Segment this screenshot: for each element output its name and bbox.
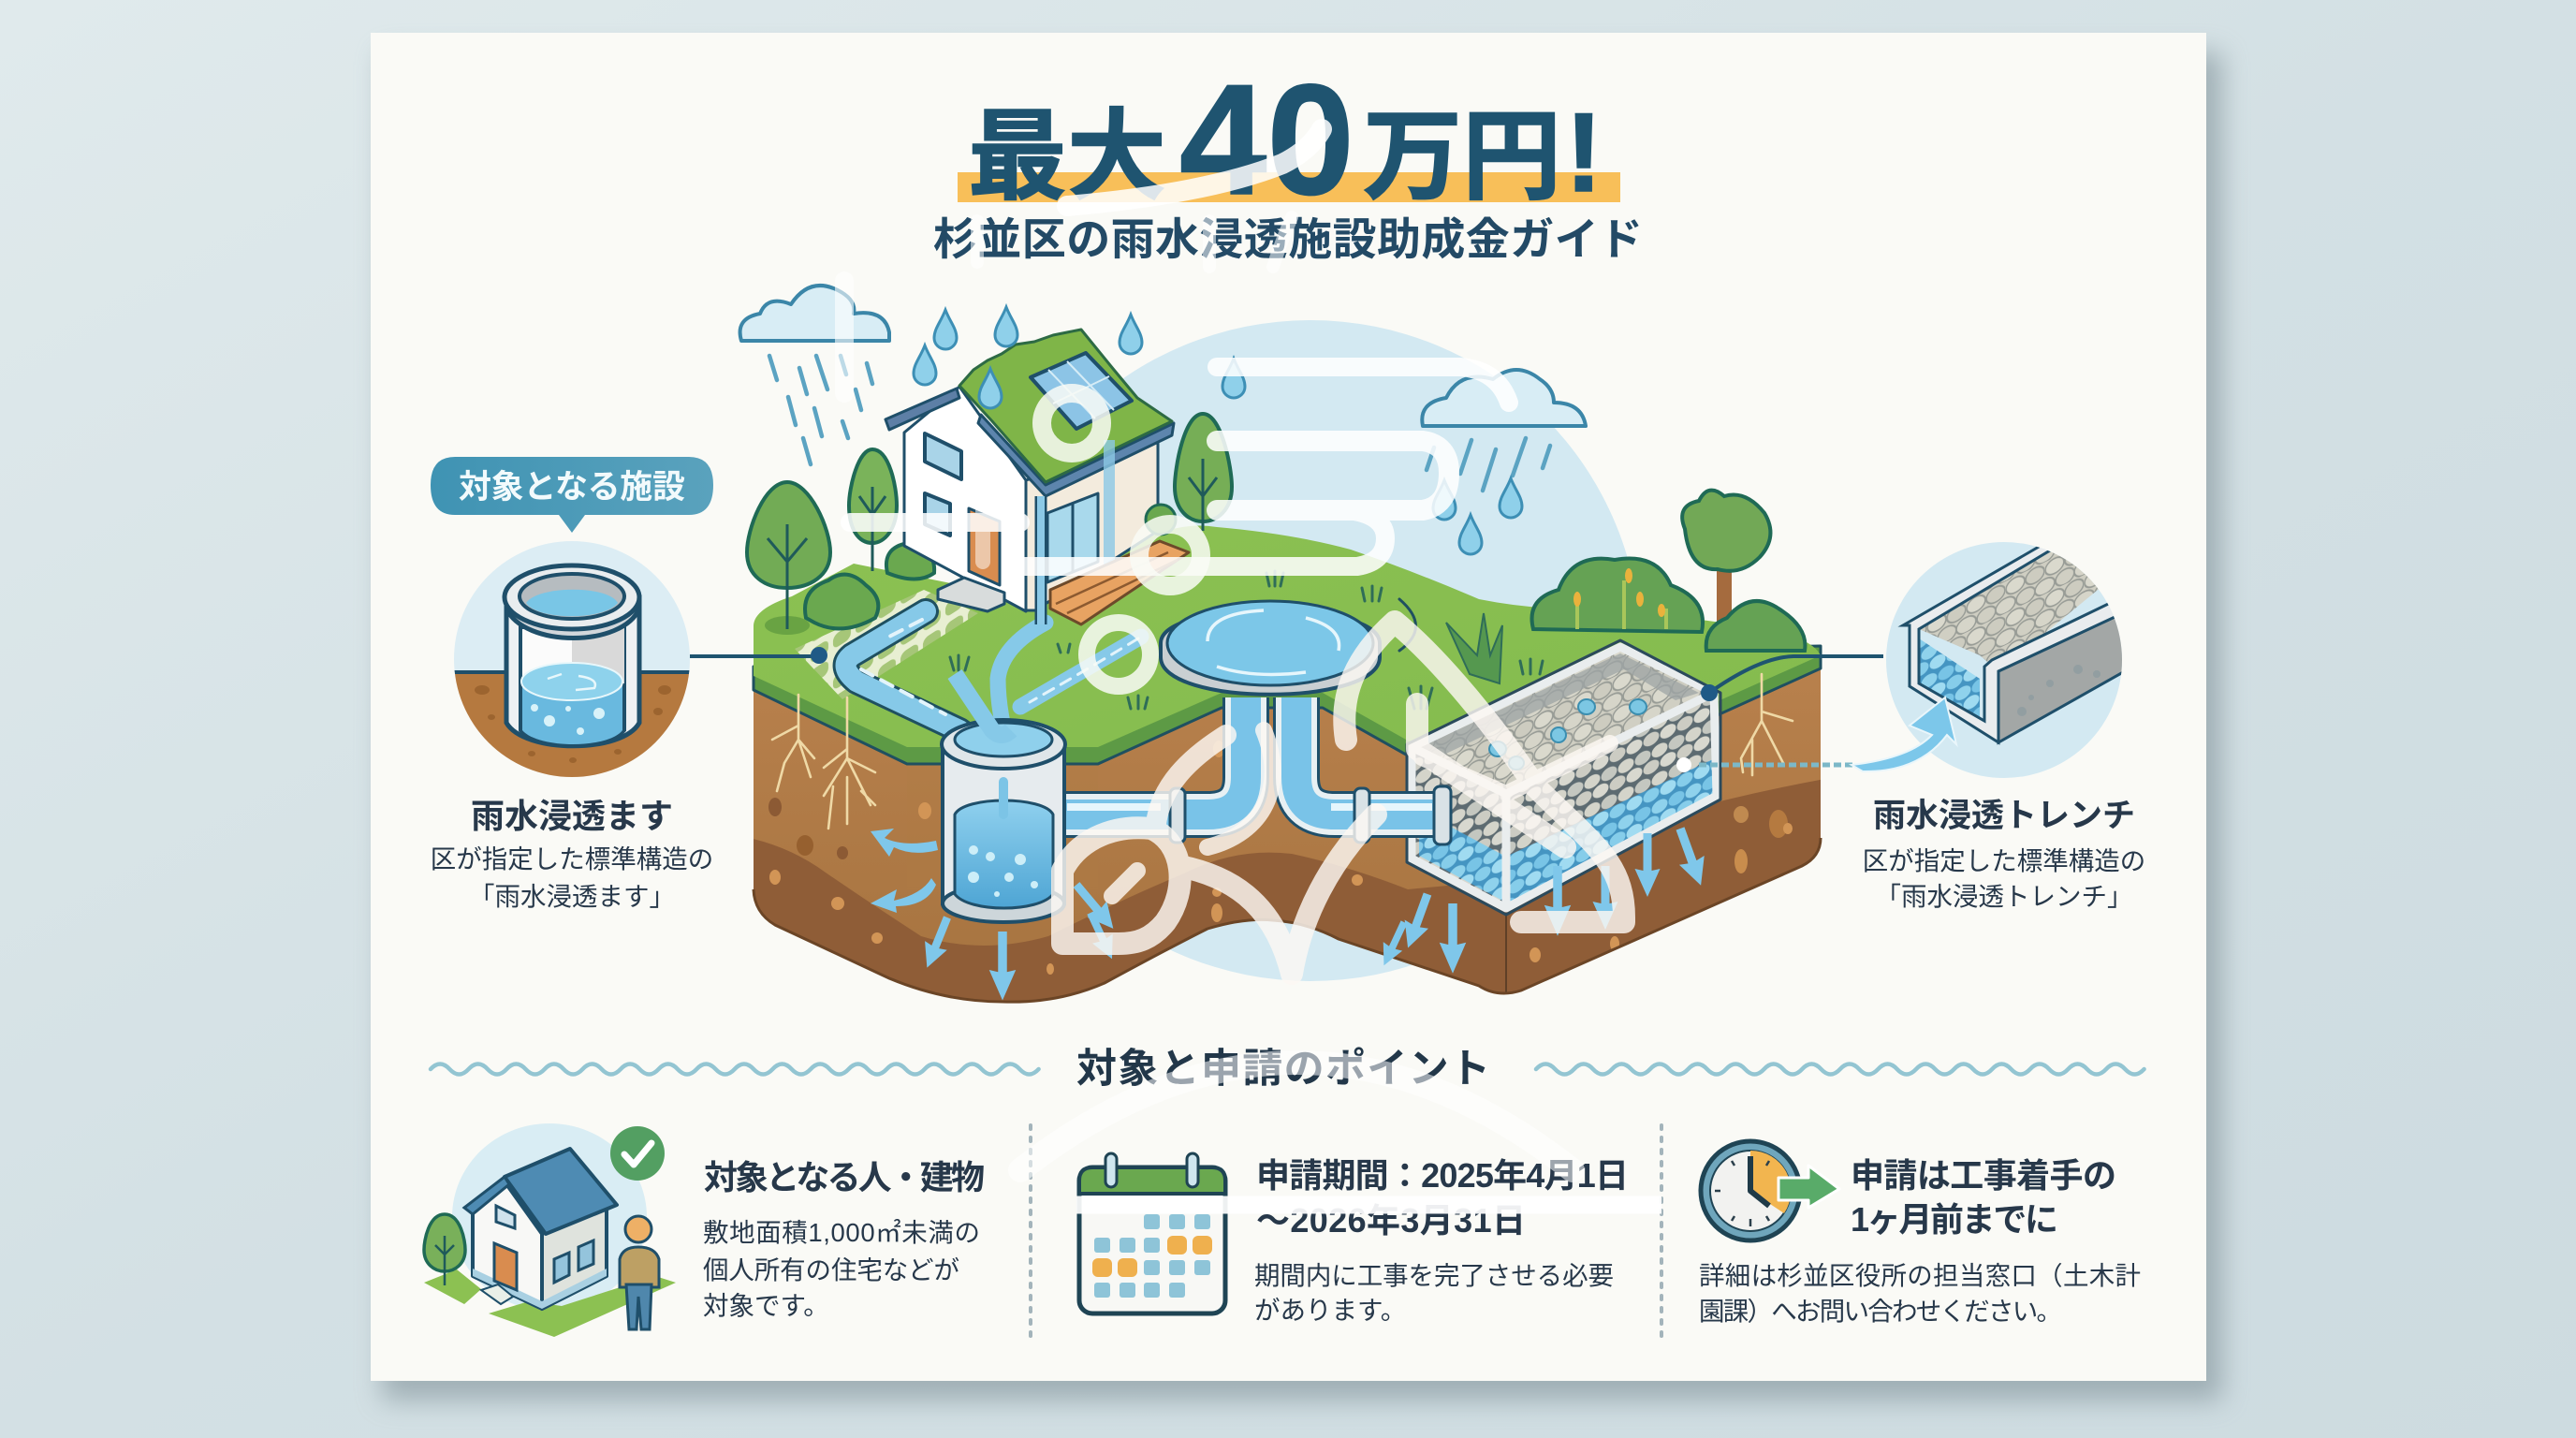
text: deadline: 詳細は杉並区役所の担当窓口（土木計 (1699, 1261, 2141, 1290)
pond (1161, 601, 1380, 695)
grass top (754, 526, 1821, 796)
text: period: 申請期間：2025年4月1日 (1256, 1156, 1629, 1195)
roof fascia (886, 389, 959, 430)
point 3: apply before construction (1699, 1141, 2141, 1326)
label: infiltration trench: 雨水浸透トレンチ (1873, 798, 2135, 834)
paved path (795, 590, 978, 699)
label: infiltration basin (431, 797, 713, 911)
point 1: who and what building (424, 1123, 985, 1337)
solar panel (1031, 353, 1132, 429)
rain drops around house (914, 307, 1245, 408)
basin body (506, 599, 639, 746)
label: infiltration basin: 「雨水浸透ます」 (469, 882, 675, 911)
text: period: があります。 (1254, 1296, 1406, 1325)
trench section (1998, 616, 2122, 745)
text: who and what: 敷地面積1,000㎡未満の (703, 1218, 980, 1247)
soil pebbles (768, 741, 1793, 975)
label: infiltration trench (1863, 798, 2145, 911)
connector line: right detail (1676, 656, 1883, 772)
title highlight bar (958, 172, 1620, 202)
dotted divider 1 (1029, 1125, 1032, 1339)
dotted divider 2 (1660, 1125, 1663, 1339)
label: infiltration basin: 区が指定した標準構造の (431, 844, 713, 873)
icon: clock with arrow (1701, 1141, 1839, 1240)
label: infiltration trench: 区が指定した標準構造の (1863, 846, 2145, 875)
small bush by deck (1146, 505, 1176, 535)
trench frame (1412, 647, 1717, 908)
left cut face (1412, 749, 1506, 908)
label: infiltration basin: 雨水浸透ます (471, 797, 673, 835)
left rain cloud (740, 286, 889, 464)
icon: house with person (424, 1123, 676, 1337)
right cut face (1506, 695, 1717, 904)
detail circle: infiltration basin (449, 538, 695, 781)
wave divider right (1536, 1064, 2144, 1075)
section heading: 対象と申請のポイント (1076, 1047, 1490, 1092)
text: who and what: 対象となる人・建物 (704, 1158, 985, 1196)
watermark icon overlay (844, 129, 1661, 1205)
downpipe (1035, 496, 1046, 624)
left wall (904, 387, 1026, 611)
watermark: rings (1042, 393, 1201, 686)
backdrop circle behind diagram (980, 320, 1641, 981)
stairs (938, 578, 1004, 611)
door (969, 508, 1000, 585)
callout pill: target facilities: 対象となる施設 (459, 469, 685, 506)
text: who and what: 対象です。 (703, 1291, 829, 1320)
text: deadline (1699, 1156, 2141, 1326)
title text: 万円 (1363, 102, 1561, 213)
title: maximum 400,000 yen (958, 51, 1620, 227)
pipe flanges (1170, 786, 1451, 844)
callout pill: target facilities (431, 457, 713, 533)
check badge (610, 1126, 665, 1181)
tree roots (772, 674, 1793, 829)
back wall shading (1421, 653, 1699, 760)
green roof (959, 330, 1172, 482)
right wall (1026, 440, 1158, 610)
rainwater infiltration basin cross-section (942, 674, 1065, 922)
watermark: wind and house lines (844, 281, 1509, 566)
text: period (1254, 1156, 1629, 1325)
label: infiltration trench: 「雨水浸透トレンチ」 (1876, 882, 2132, 911)
watermark: leaf and bow shapes (1062, 622, 1624, 974)
point 2: application period (1079, 1153, 1629, 1325)
connector line: left detail (690, 647, 827, 664)
glass door (1047, 493, 1098, 582)
wave divider left (431, 1064, 1039, 1075)
house with green roof (886, 330, 1189, 624)
right tree beside house (1175, 414, 1232, 531)
pipes (1048, 697, 1446, 814)
stone-filled trench (1407, 640, 1720, 915)
text: period: ～2026年3月31日 (1256, 1201, 1526, 1240)
detail circle: infiltration trench (1852, 542, 2153, 778)
tall grass (1446, 613, 1502, 683)
shrubs and tree on right (1532, 491, 1805, 651)
isometric landscape diagram (740, 286, 1825, 1011)
right rain cloud (1422, 370, 1586, 554)
text: period: 期間内に工事を完了させる必要 (1254, 1261, 1614, 1290)
basin rim (506, 597, 639, 638)
paper sheet (371, 33, 2222, 1401)
dark base line (1505, 912, 1507, 992)
water channels (846, 599, 1415, 760)
watermark: faint arch over lower section (1020, 1063, 1573, 1170)
text: deadline: 1ヶ月前までに (1851, 1200, 2058, 1239)
title text: 最大 (968, 102, 1166, 213)
text: who and what (703, 1158, 985, 1320)
wood deck (1050, 541, 1189, 624)
watermark: band over calendar and dates (1076, 1196, 1661, 1213)
title text: ! (1565, 90, 1603, 215)
grass tufts (950, 571, 1543, 709)
subtitle: 杉並区の雨水浸透施設助成金ガイド (933, 214, 1643, 264)
soil block (749, 651, 1825, 1011)
left trees (747, 449, 934, 635)
text: who and what: 個人所有の住宅などが (703, 1255, 959, 1284)
windows (925, 433, 961, 536)
text: deadline: 園課）へお問い合わせください。 (1699, 1297, 2062, 1326)
icon: calendar (1079, 1153, 1225, 1313)
title text: 40 (1179, 51, 1354, 227)
infiltration arrows (871, 824, 1713, 1000)
watermark: subtitle smudges (977, 217, 1292, 267)
watermark: title swoosh (1067, 129, 1322, 206)
flow arrow into trench (1852, 697, 1956, 771)
grass edge band (754, 646, 1821, 811)
text: deadline: 申請は工事着手の (1851, 1156, 2116, 1195)
